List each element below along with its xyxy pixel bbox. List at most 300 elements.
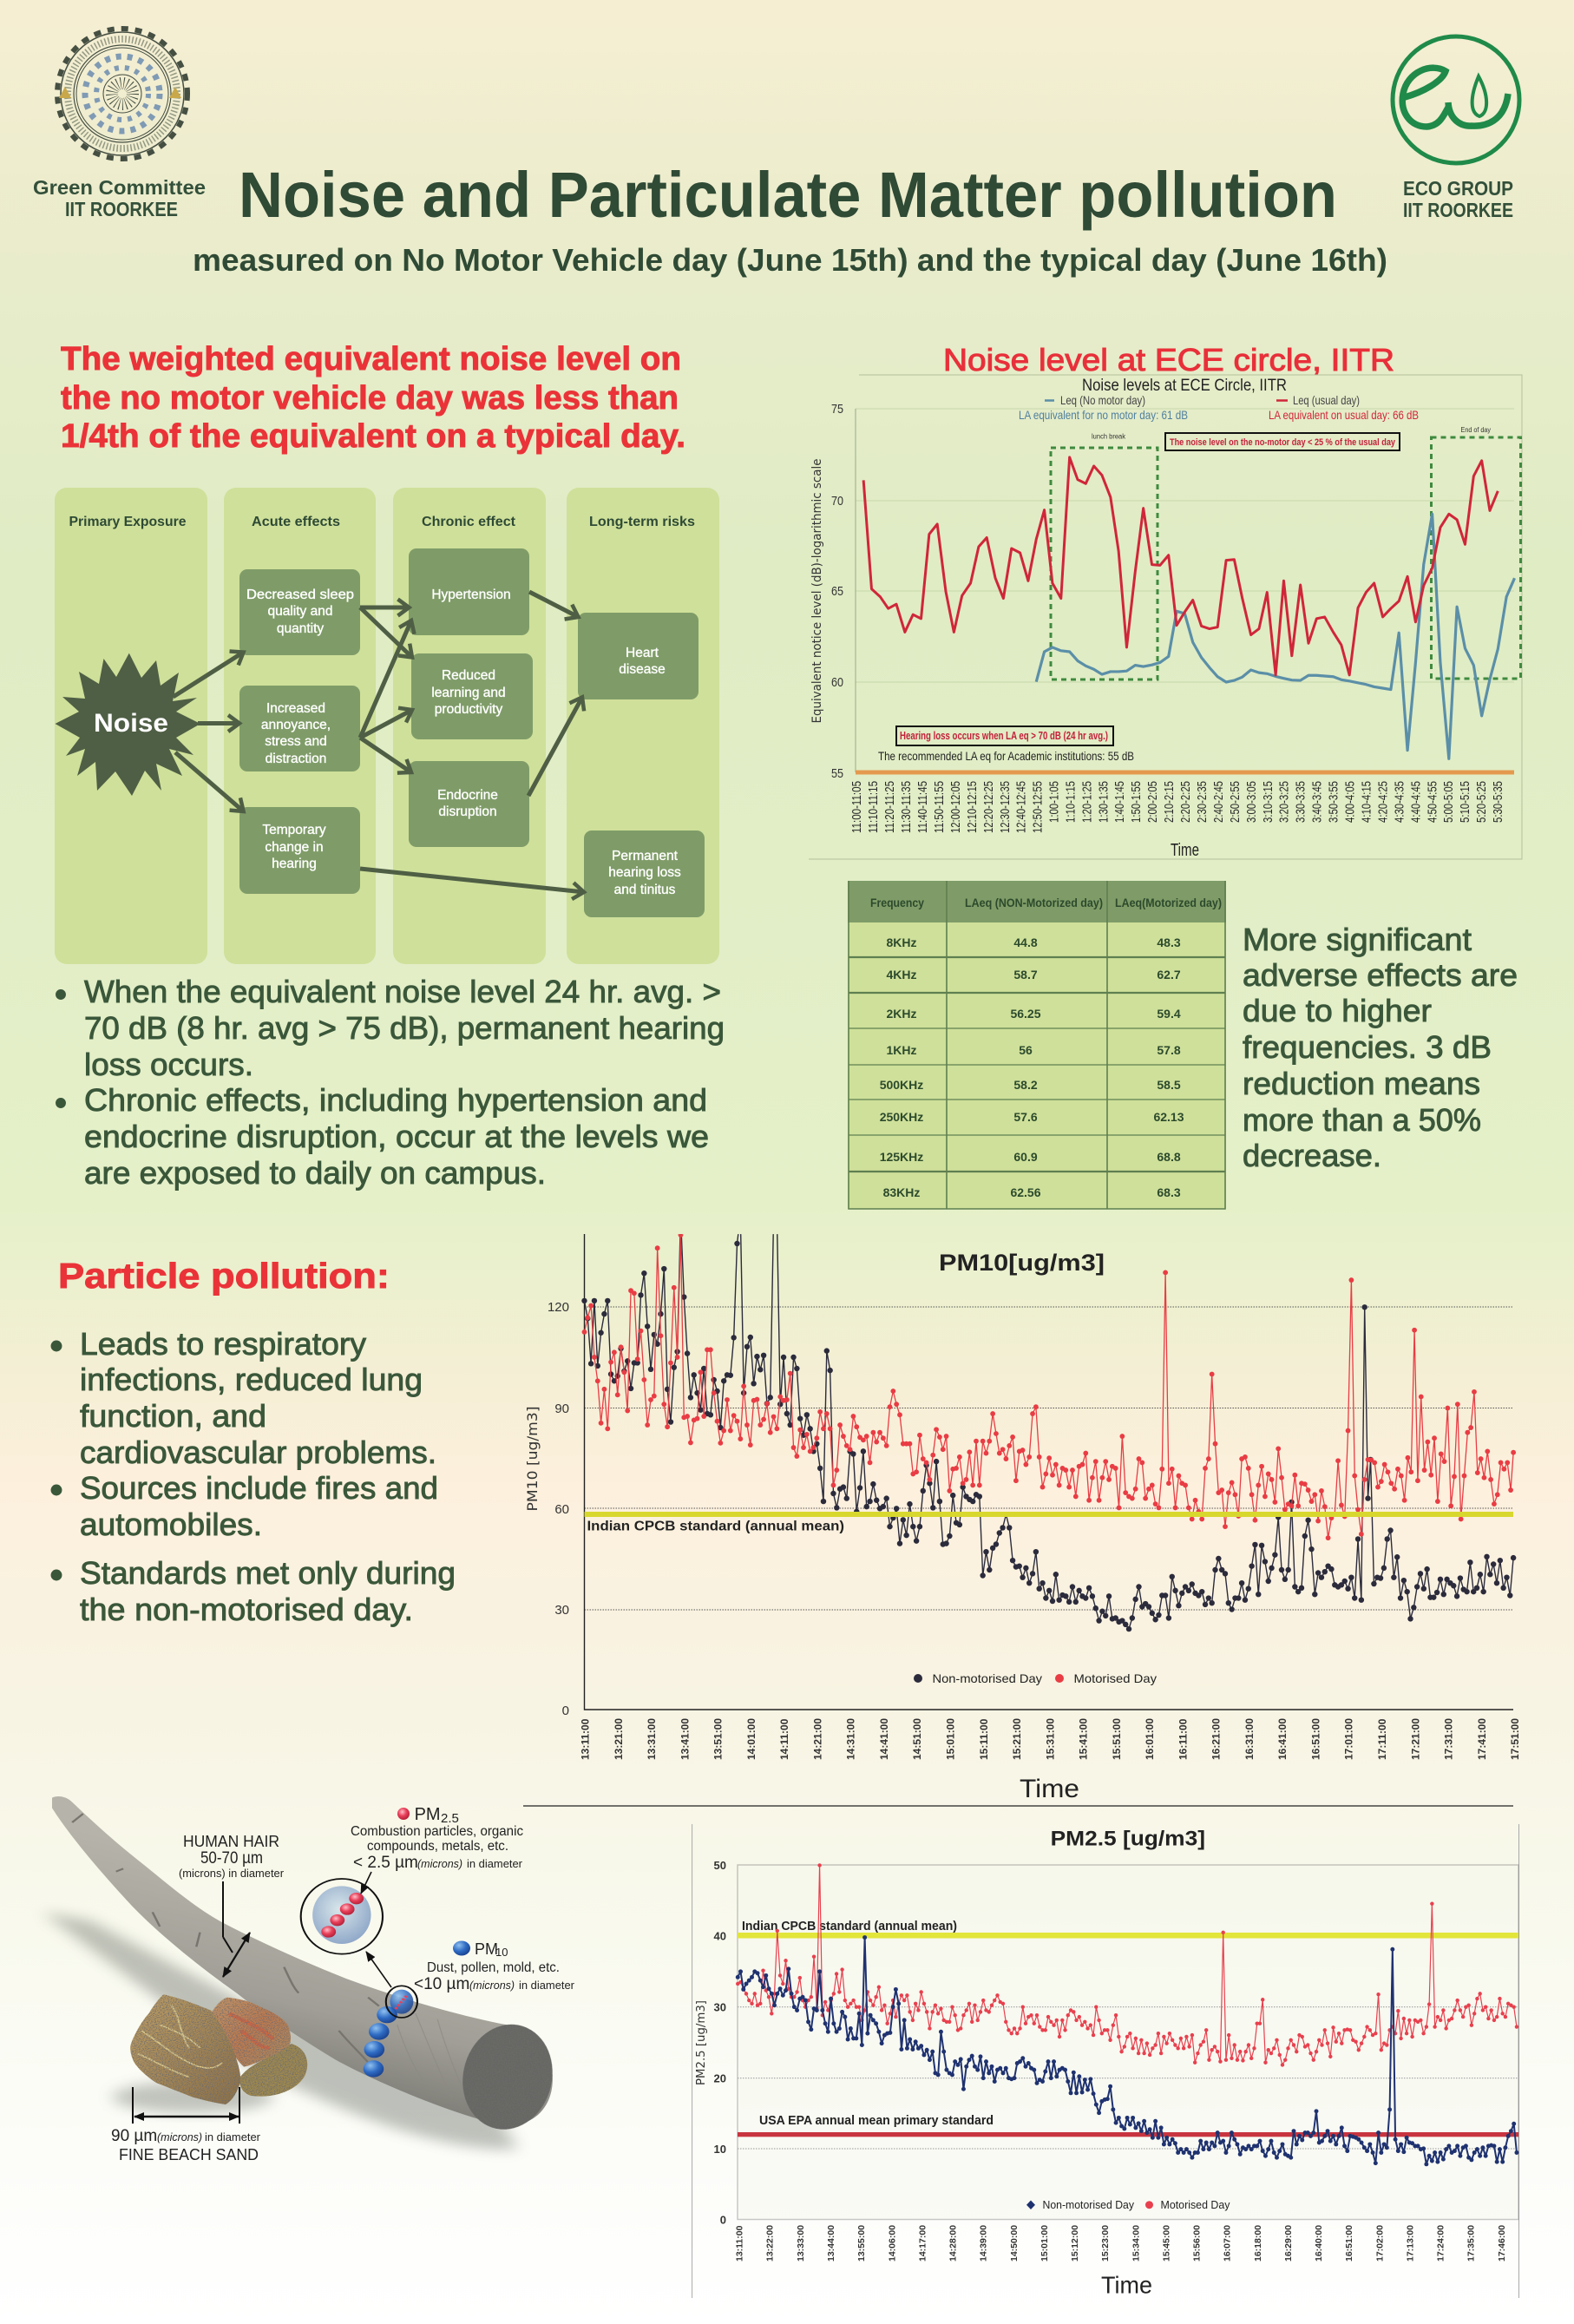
column: Chronic effect: Chronic effect (422, 515, 516, 529)
x axis labels: 17:21:00 (1409, 1718, 1421, 1760)
icon: PM10 blue spheres (364, 1986, 417, 2078)
x axis labels: 3:10-3:15 (1261, 781, 1276, 823)
y axis title: Equivalent notice level (dB)-logarithmic scale (810, 458, 824, 724)
x axis labels: 2:40-2:45 (1211, 781, 1226, 823)
label: fine beach sand: in diameter (205, 2131, 260, 2143)
chart title: Noise levels at ECE Circle, IITR (1082, 377, 1287, 395)
line: 55 dB recommended (856, 771, 1514, 774)
label: PM2.5 (351, 1805, 523, 1872)
x axis labels: 13:55:00 (856, 2225, 867, 2262)
illustration: particle size comparison (43, 1796, 574, 2163)
x axis labels: 11:20-11:25 (882, 781, 897, 833)
x axis labels: 11:30-11:35 (899, 781, 914, 833)
label: fine beach sand (111, 2127, 260, 2163)
label: human hair: 50-70 µm (200, 1849, 263, 1868)
x axis labels: 3:30-3:35 (1294, 781, 1308, 823)
node: Increased annoyance: stress and (265, 734, 327, 749)
node: Decreased sleep: quality and (268, 604, 332, 619)
bullet list: particle pollution: function, and (80, 1398, 266, 1434)
x axis labels: 12:10-12:15 (965, 781, 980, 833)
y axis ticks: 20 (714, 2072, 726, 2085)
x axis labels: 13:31:00 (646, 1718, 658, 1760)
x axis labels: 16:51:00 (1309, 1718, 1322, 1760)
series: PM10 non-motorised and motorised (584, 1216, 1513, 1629)
bullet list: noise health effects: Chronic effects, including hypertension and (84, 1082, 707, 1118)
callout: lunch break (1051, 432, 1158, 679)
x axis labels: 17:13:00 (1406, 2225, 1416, 2262)
callout: hearing loss threshold: Hearing loss occurs when LA eq > 70 dB (24 hr avg.) (900, 730, 1108, 742)
node: Decreased sleep: Decreased sleep (246, 588, 354, 602)
x axis labels: 5:20-5:25 (1474, 781, 1489, 823)
x axis labels: 13:51:00 (712, 1718, 725, 1760)
x axis labels: 2:10-2:15 (1162, 781, 1177, 823)
x axis labels: 17:46:00 (1497, 2225, 1507, 2262)
logo: Eco Group (1393, 36, 1519, 163)
node: Noise starburst (56, 653, 200, 796)
x axis labels: 16:41:00 (1276, 1718, 1289, 1760)
x axis labels: 4:30-4:35 (1392, 781, 1407, 823)
x axis labels: 15:31:00 (1044, 1718, 1056, 1760)
node: Reduced learning: learning and (431, 686, 506, 700)
label: PM10: 10 (495, 1946, 508, 1959)
table rows: 62.7 (1157, 968, 1181, 981)
table rows: 58.5 (1157, 1078, 1181, 1092)
x axis labels: 15:21:00 (1011, 1718, 1023, 1760)
x axis labels: 11:50-11:55 (932, 781, 947, 833)
label: human hair (179, 1833, 285, 1880)
x axis labels: 13:41:00 (679, 1718, 691, 1760)
bullet list: noise health effects (56, 974, 725, 1191)
x axis labels: 15:56:00 (1192, 2225, 1203, 2262)
bullet list: particle pollution: Standards met only during (80, 1555, 456, 1591)
x axis labels: 14:01:00 (745, 1718, 757, 1760)
bullet list: particle pollution: automobiles. (80, 1507, 262, 1542)
x axis labels: 11:40-11:45 (915, 781, 930, 833)
x axis labels: 17:51:00 (1509, 1718, 1521, 1760)
x axis labels: 2:00-2:05 (1145, 781, 1160, 823)
table rows: 1KHz (886, 1043, 917, 1057)
y axis ticks: 0 (562, 1704, 569, 1718)
node: Permanent hearing loss: and tinitus (614, 883, 676, 897)
column: Long-term risks: Long-term risks (589, 515, 695, 529)
x axis labels: 4:20-4:25 (1375, 781, 1390, 823)
callout: 25 percent: The noise level on the no-motor day < 25 % of the usual day (1170, 437, 1396, 448)
heading: Noise level at ECE circle: Noise level at ECE circle, IITR (943, 342, 1394, 377)
x axis labels: 15:01:00 (944, 1718, 956, 1760)
x axis labels: 16:11:00 (1177, 1718, 1189, 1760)
line chart: noise levels (809, 375, 1522, 860)
bullet list: noise health effects: loss occurs. (84, 1047, 253, 1082)
x axis labels: 14:28:00 (948, 2225, 958, 2262)
legend (1026, 2198, 1230, 2211)
x axis labels: 15:11:00 (978, 1718, 990, 1760)
x axis labels: 12:20-12:25 (981, 781, 996, 833)
x axis labels (580, 1718, 1521, 1760)
node: Temporary change: Temporary (262, 823, 326, 837)
node: Increased annoyance: distraction (266, 752, 326, 766)
callout: lunch break: lunch break (1092, 432, 1126, 441)
y axis ticks: 10 (714, 2143, 726, 2156)
x axis labels: 17:35:00 (1466, 2225, 1477, 2262)
table rows: 2KHz (886, 1007, 917, 1021)
node: Endocrine disruption: Endocrine (437, 788, 498, 803)
node: Temporary change (239, 807, 360, 894)
table rows: 44.8 (1013, 936, 1038, 949)
x axis labels: 4:40-4:45 (1408, 781, 1423, 823)
headline: weighted equivalent noise: the no motor vehicle day was less than (61, 380, 679, 417)
table rows (880, 936, 1184, 1199)
x axis labels: 17:31:00 (1442, 1718, 1454, 1760)
label: PM2.5: Combustion particles, organic (351, 1824, 523, 1839)
x axis labels: 16:18:00 (1253, 2225, 1263, 2262)
table rows: 250KHz (880, 1110, 923, 1124)
logo caption: Eco Group (1403, 177, 1513, 221)
table rows: 68.3 (1157, 1185, 1181, 1199)
x axis labels: 13:11:00 (735, 2225, 745, 2262)
x axis labels: 17:41:00 (1476, 1718, 1488, 1760)
chart title: PM10[ug/m3] (939, 1250, 1105, 1276)
x axis labels: 14:31:00 (845, 1718, 857, 1760)
x axis labels: 14:51:00 (911, 1718, 923, 1760)
node: Endocrine disruption: disruption (438, 804, 497, 819)
label: PM10: PM (475, 1940, 498, 1958)
node: Temporary change: change in (265, 840, 324, 855)
x axis labels: 16:01:00 (1144, 1718, 1156, 1760)
x axis labels: 13:11:00 (580, 1718, 592, 1760)
title: Noise and Particulate Matter pollution (239, 159, 1337, 231)
legend: LA equivalent for no motor day: 61 dB (1019, 408, 1188, 422)
x axis labels: 4:50-4:55 (1425, 781, 1440, 823)
line chart: PM2.5 (692, 1824, 1518, 2298)
x axis labels (849, 781, 1505, 833)
y axis ticks: 60 (831, 675, 843, 690)
label: PM10: in diameter (519, 1979, 574, 1992)
bullet list: particle pollution: infections, reduced lung (80, 1362, 423, 1397)
y axis ticks: 65 (831, 584, 843, 599)
x axis labels: 12:40-12:45 (1013, 781, 1029, 833)
header (33, 29, 1519, 278)
x axis labels: 14:11:00 (778, 1718, 790, 1760)
node: Permanent hearing loss: Permanent (612, 849, 679, 863)
flow diagram: noise effects (55, 488, 719, 964)
icon: human hair strand (52, 1796, 559, 2133)
legend (914, 1671, 1157, 1685)
x axis labels: 17:02:00 (1374, 2225, 1385, 2262)
table rows: 4KHz (886, 968, 917, 981)
callout: end of day: End of day (1461, 426, 1491, 434)
node: Hypertension (409, 548, 529, 635)
band: Indian CPCB standard PM2.5: Indian CPCB standard (annual mean) (742, 1920, 957, 1933)
x axis labels: 16:07:00 (1223, 2225, 1233, 2262)
column: Primary Exposure: Primary Exposure (69, 515, 187, 529)
table rows: 62.56 (1010, 1185, 1041, 1199)
node: Decreased sleep: quantity (277, 621, 324, 636)
x axis labels: 2:50-2:55 (1228, 781, 1243, 823)
bullet list: noise health effects: When the equivalent noise level 24 hr. avg. > (84, 974, 721, 1009)
logo caption: Eco Group: ECO GROUP (1403, 177, 1513, 200)
node: Reduced learning: Reduced (442, 668, 495, 683)
label: PM2.5: in diameter (467, 1858, 522, 1870)
bullet list: particle pollution: Leads to respiratory (80, 1326, 366, 1362)
label: PM2.5: (microns) (417, 1858, 462, 1870)
x axis labels: 14:41:00 (878, 1718, 890, 1760)
series: PM2.5 motorised and non-motorised (738, 1865, 1517, 2164)
text block: frequency note: more than a 50% (1243, 1102, 1481, 1138)
x axis labels: 15:41:00 (1078, 1718, 1090, 1760)
bullet list: particle pollution (51, 1326, 456, 1627)
x axis labels: 5:00-5:05 (1441, 781, 1456, 823)
x axis labels: 16:40:00 (1314, 2225, 1324, 2262)
x axis labels: 4:00-4:05 (1343, 781, 1357, 823)
node: Temporary change: hearing (272, 857, 317, 871)
legend: Motorised Day (1161, 2198, 1230, 2211)
table rows: 57.8 (1157, 1043, 1181, 1057)
x axis labels: 3:40-3:45 (1310, 781, 1325, 823)
x axis labels: 12:50-12:55 (1031, 781, 1045, 833)
x axis labels: 13:33:00 (796, 2225, 806, 2262)
bullet list: noise health effects: are exposed to daily on campus. (84, 1155, 546, 1191)
x axis labels: 14:50:00 (1009, 2225, 1020, 2262)
table header: LAeq (NON-Motorized day) (965, 896, 1103, 909)
x axis labels: 11:00-11:05 (849, 781, 864, 833)
logo caption: Eco Group: IIT ROORKEE (1403, 199, 1513, 221)
x axis labels: 16:29:00 (1283, 2225, 1294, 2262)
headline: weighted equivalent noise: 1/4th of the equivalent on a typical day. (61, 418, 685, 455)
x axis labels: 1:50-1:55 (1129, 781, 1144, 823)
x axis labels: 15:23:00 (1100, 2225, 1111, 2262)
table header: Frequency (870, 896, 924, 909)
text block: frequency note: frequencies. 3 dB (1243, 1029, 1492, 1065)
x axis labels: 1:30-1:35 (1096, 781, 1111, 823)
table rows: 59.4 (1157, 1007, 1181, 1021)
text block: frequency note: decrease. (1243, 1138, 1381, 1173)
x axis labels: 3:00-3:05 (1244, 781, 1259, 823)
label: PM10: (microns) (469, 1979, 515, 1992)
arrows between nodes (174, 592, 584, 892)
x axis labels: 2:20-2:25 (1178, 781, 1193, 823)
node: Reduced learning: productivity (435, 702, 502, 717)
band: USA EPA standard (738, 2114, 1518, 2137)
x axis labels: 16:21:00 (1210, 1718, 1223, 1760)
x axis labels: 3:50-3:55 (1327, 781, 1341, 823)
node: Increased annoyance (239, 686, 360, 771)
label: fine beach sand: FINE BEACH SAND (119, 2146, 259, 2163)
callout: end of day (1432, 426, 1520, 679)
y axis ticks: 50 (714, 1859, 726, 1872)
x axis labels: 3:20-3:25 (1277, 781, 1292, 823)
logo caption: Green Committee: Green Committee (33, 176, 206, 199)
logo: IIT Roorkee emblem (57, 29, 187, 159)
line chart: PM10 (523, 1216, 1521, 1806)
bullet list: particle pollution: Sources include fires and (80, 1470, 438, 1506)
table rows: 56 (1019, 1043, 1033, 1057)
text block: frequency note: More significant (1243, 922, 1472, 957)
logo caption: Green Committee: IIT ROORKEE (65, 198, 178, 220)
legend: Leq (usual day) (1293, 393, 1360, 407)
text block: frequency note (1243, 922, 1518, 1173)
table rows: 58.7 (1013, 968, 1038, 981)
node: Increased annoyance: annoyance, (261, 718, 331, 732)
x axis labels: 12:30-12:35 (998, 781, 1013, 833)
node: Noise starburst: Noise (94, 709, 168, 738)
x axis title: Time (1171, 841, 1199, 860)
x axis labels: 5:10-5:15 (1458, 781, 1472, 823)
x axis labels: 15:01:00 (1039, 2225, 1050, 2262)
x axis labels: 15:12:00 (1070, 2225, 1080, 2262)
label: human hair: HUMAN HAIR (183, 1833, 279, 1850)
table rows: 56.25 (1010, 1007, 1041, 1021)
x axis labels: 5:30-5:35 (1491, 781, 1505, 823)
label: human hair: (microns) in diameter (179, 1867, 285, 1880)
label: PM10: <10 µm (414, 1975, 469, 1993)
column: Acute effects: Acute effects (252, 515, 340, 529)
table rows: 125KHz (880, 1150, 923, 1164)
x axis labels: 1:10-1:15 (1063, 781, 1078, 823)
y axis ticks: 55 (831, 766, 843, 781)
series: no motor day (1036, 514, 1514, 758)
y axis ticks (714, 1859, 726, 2227)
callout: hearing loss threshold (896, 726, 1113, 745)
x axis labels: 11:10-11:15 (866, 781, 881, 833)
y axis ticks: 120 (548, 1300, 569, 1315)
node: Heart disease: disease (619, 662, 666, 677)
node: Heart disease: Heart (626, 646, 659, 660)
node: Endocrine disruption (409, 761, 529, 847)
x axis labels: 2:30-2:35 (1195, 781, 1210, 823)
band: Indian CPCB standard PM2.5 (738, 1920, 1518, 1939)
icon: beach sand grains (130, 1994, 307, 2104)
text block: frequency note: due to higher (1243, 993, 1432, 1028)
x axis labels: 15:34:00 (1131, 2225, 1141, 2262)
x axis labels: 15:51:00 (1111, 1718, 1123, 1760)
band: Indian CPCB standard PM10 (585, 1512, 1513, 1534)
x axis labels: 17:11:00 (1376, 1718, 1388, 1760)
table: frequency versus LAeq (848, 881, 1226, 1209)
series: usual day (863, 457, 1498, 675)
bullet list: noise health effects: 70 dB (8 hr. avg > 75 dB), permanent hearing (84, 1010, 725, 1046)
legend: Motorised Day (1074, 1671, 1157, 1685)
legend: Non-motorised Day (1043, 2198, 1134, 2211)
text block: frequency note: adverse effects are (1243, 957, 1518, 993)
y axis ticks: 30 (554, 1603, 569, 1618)
node: Reduced learning (411, 653, 533, 739)
label: PM2.5: < 2.5 µm (353, 1854, 418, 1872)
x axis labels: 16:51:00 (1344, 2225, 1354, 2262)
table rows: 83KHz (883, 1185, 920, 1199)
label: fine beach sand: (microns) (157, 2131, 202, 2143)
x axis title: Time (1101, 2272, 1152, 2298)
table rows: 48.3 (1157, 936, 1181, 949)
text block: frequency note: reduction means (1243, 1066, 1480, 1101)
table rows: 500KHz (880, 1078, 923, 1092)
y axis ticks: 60 (554, 1502, 569, 1517)
table rows: 68.8 (1157, 1150, 1181, 1164)
x axis labels: 17:01:00 (1343, 1718, 1355, 1760)
bullet list: noise health effects: endocrine disruption, occur at the levels we (84, 1119, 709, 1154)
column: Primary Exposure (55, 488, 207, 964)
band: Indian CPCB standard PM10: Indian CPCB standard (annual mean) (587, 1519, 844, 1534)
node: Permanent hearing loss (584, 830, 705, 917)
bullet list: particle pollution: cardiovascular problems. (80, 1434, 436, 1470)
table rows: 57.6 (1013, 1110, 1038, 1124)
x axis labels: 12:00-12:05 (948, 781, 963, 833)
y axis ticks: 70 (831, 494, 843, 509)
x axis labels: 14:06:00 (887, 2225, 897, 2262)
y axis ticks: 40 (714, 1930, 726, 1943)
x axis labels: 14:17:00 (917, 2225, 928, 2262)
note: recommended level: The recommended LA eq for Academic institutions: 55 dB (878, 749, 1134, 763)
legend: Leq (No motor day) (1060, 393, 1145, 407)
x axis labels: 1:40-1:45 (1112, 781, 1127, 823)
callout: 25 percent (1165, 433, 1400, 450)
x axis labels: 16:31:00 (1243, 1718, 1256, 1760)
table rows: 8KHz (886, 936, 917, 949)
y axis ticks: 90 (554, 1402, 569, 1416)
x axis labels: 14:21:00 (811, 1718, 823, 1760)
x axis labels: 13:22:00 (765, 2225, 776, 2262)
headline: weighted equivalent noise (61, 341, 685, 455)
subtitle: measured on No Motor Vehicle day (June 15th) and the typical day (June 16th) (193, 242, 1387, 278)
x axis labels: 13:21:00 (613, 1718, 625, 1760)
label: PM2.5: PM (415, 1805, 441, 1824)
y axis title: PM2.5 [ug/m3] (695, 2000, 708, 2085)
x axis labels: 15:45:00 (1161, 2225, 1171, 2262)
table header: LAeq(Motorized day) (1115, 896, 1222, 909)
headline: weighted equivalent noise: The weighted equivalent noise level on (61, 341, 681, 377)
legend: Non-motorised Day (932, 1671, 1042, 1685)
node: Decreased sleep (239, 569, 360, 655)
node: Increased annoyance: Increased (266, 701, 325, 716)
x axis labels: 1:20-1:25 (1079, 781, 1094, 823)
x axis labels (735, 2225, 1507, 2262)
table rows: 58.2 (1013, 1078, 1038, 1092)
column: Acute effects (224, 488, 376, 964)
y axis ticks (548, 1300, 569, 1718)
y axis ticks: 75 (831, 402, 843, 417)
icon: PM2.5 magnified orb (301, 1879, 383, 1954)
column: Long-term risks (567, 488, 719, 964)
y axis title: PM10 [ug/m3] (524, 1407, 541, 1511)
label: fine beach sand: 90 µm (111, 2127, 157, 2145)
label: PM2.5: 2.5 (441, 1811, 459, 1826)
node: Hypertension: Hypertension (431, 588, 511, 602)
table rows: 62.13 (1153, 1110, 1184, 1124)
chart title: PM2.5 [ug/m3] (1051, 1828, 1205, 1850)
band: USA EPA standard: USA EPA annual mean primary standard (759, 2114, 994, 2128)
x axis labels: 4:10-4:15 (1359, 781, 1374, 823)
y axis ticks: 30 (714, 2001, 726, 2014)
arrows and dimension lines (133, 1872, 391, 2124)
node: Heart disease (578, 613, 698, 699)
y axis ticks: 0 (720, 2213, 726, 2227)
label: PM2.5: compounds, metals, etc. (367, 1839, 508, 1854)
table rows: 60.9 (1013, 1150, 1038, 1164)
logo caption: Green Committee (33, 176, 206, 220)
label: PM10 (414, 1940, 574, 1993)
column: Chronic effect (393, 488, 546, 964)
node: Permanent hearing loss: hearing loss (608, 865, 681, 880)
legend: LA equivalent on usual day: 66 dB (1269, 408, 1419, 422)
x axis title: Time (1020, 1775, 1079, 1803)
x axis labels: 17:24:00 (1436, 2225, 1446, 2262)
x axis labels: 1:00-1:05 (1046, 781, 1061, 823)
y axis ticks (831, 402, 843, 781)
legend (1019, 393, 1419, 422)
heading: Particle pollution: Particle pollution: (58, 1256, 390, 1296)
bullet list: particle pollution: the non-motorised day. (80, 1592, 413, 1627)
label: PM10: Dust, pollen, mold, etc. (427, 1960, 560, 1975)
x axis labels: 14:39:00 (979, 2225, 989, 2262)
